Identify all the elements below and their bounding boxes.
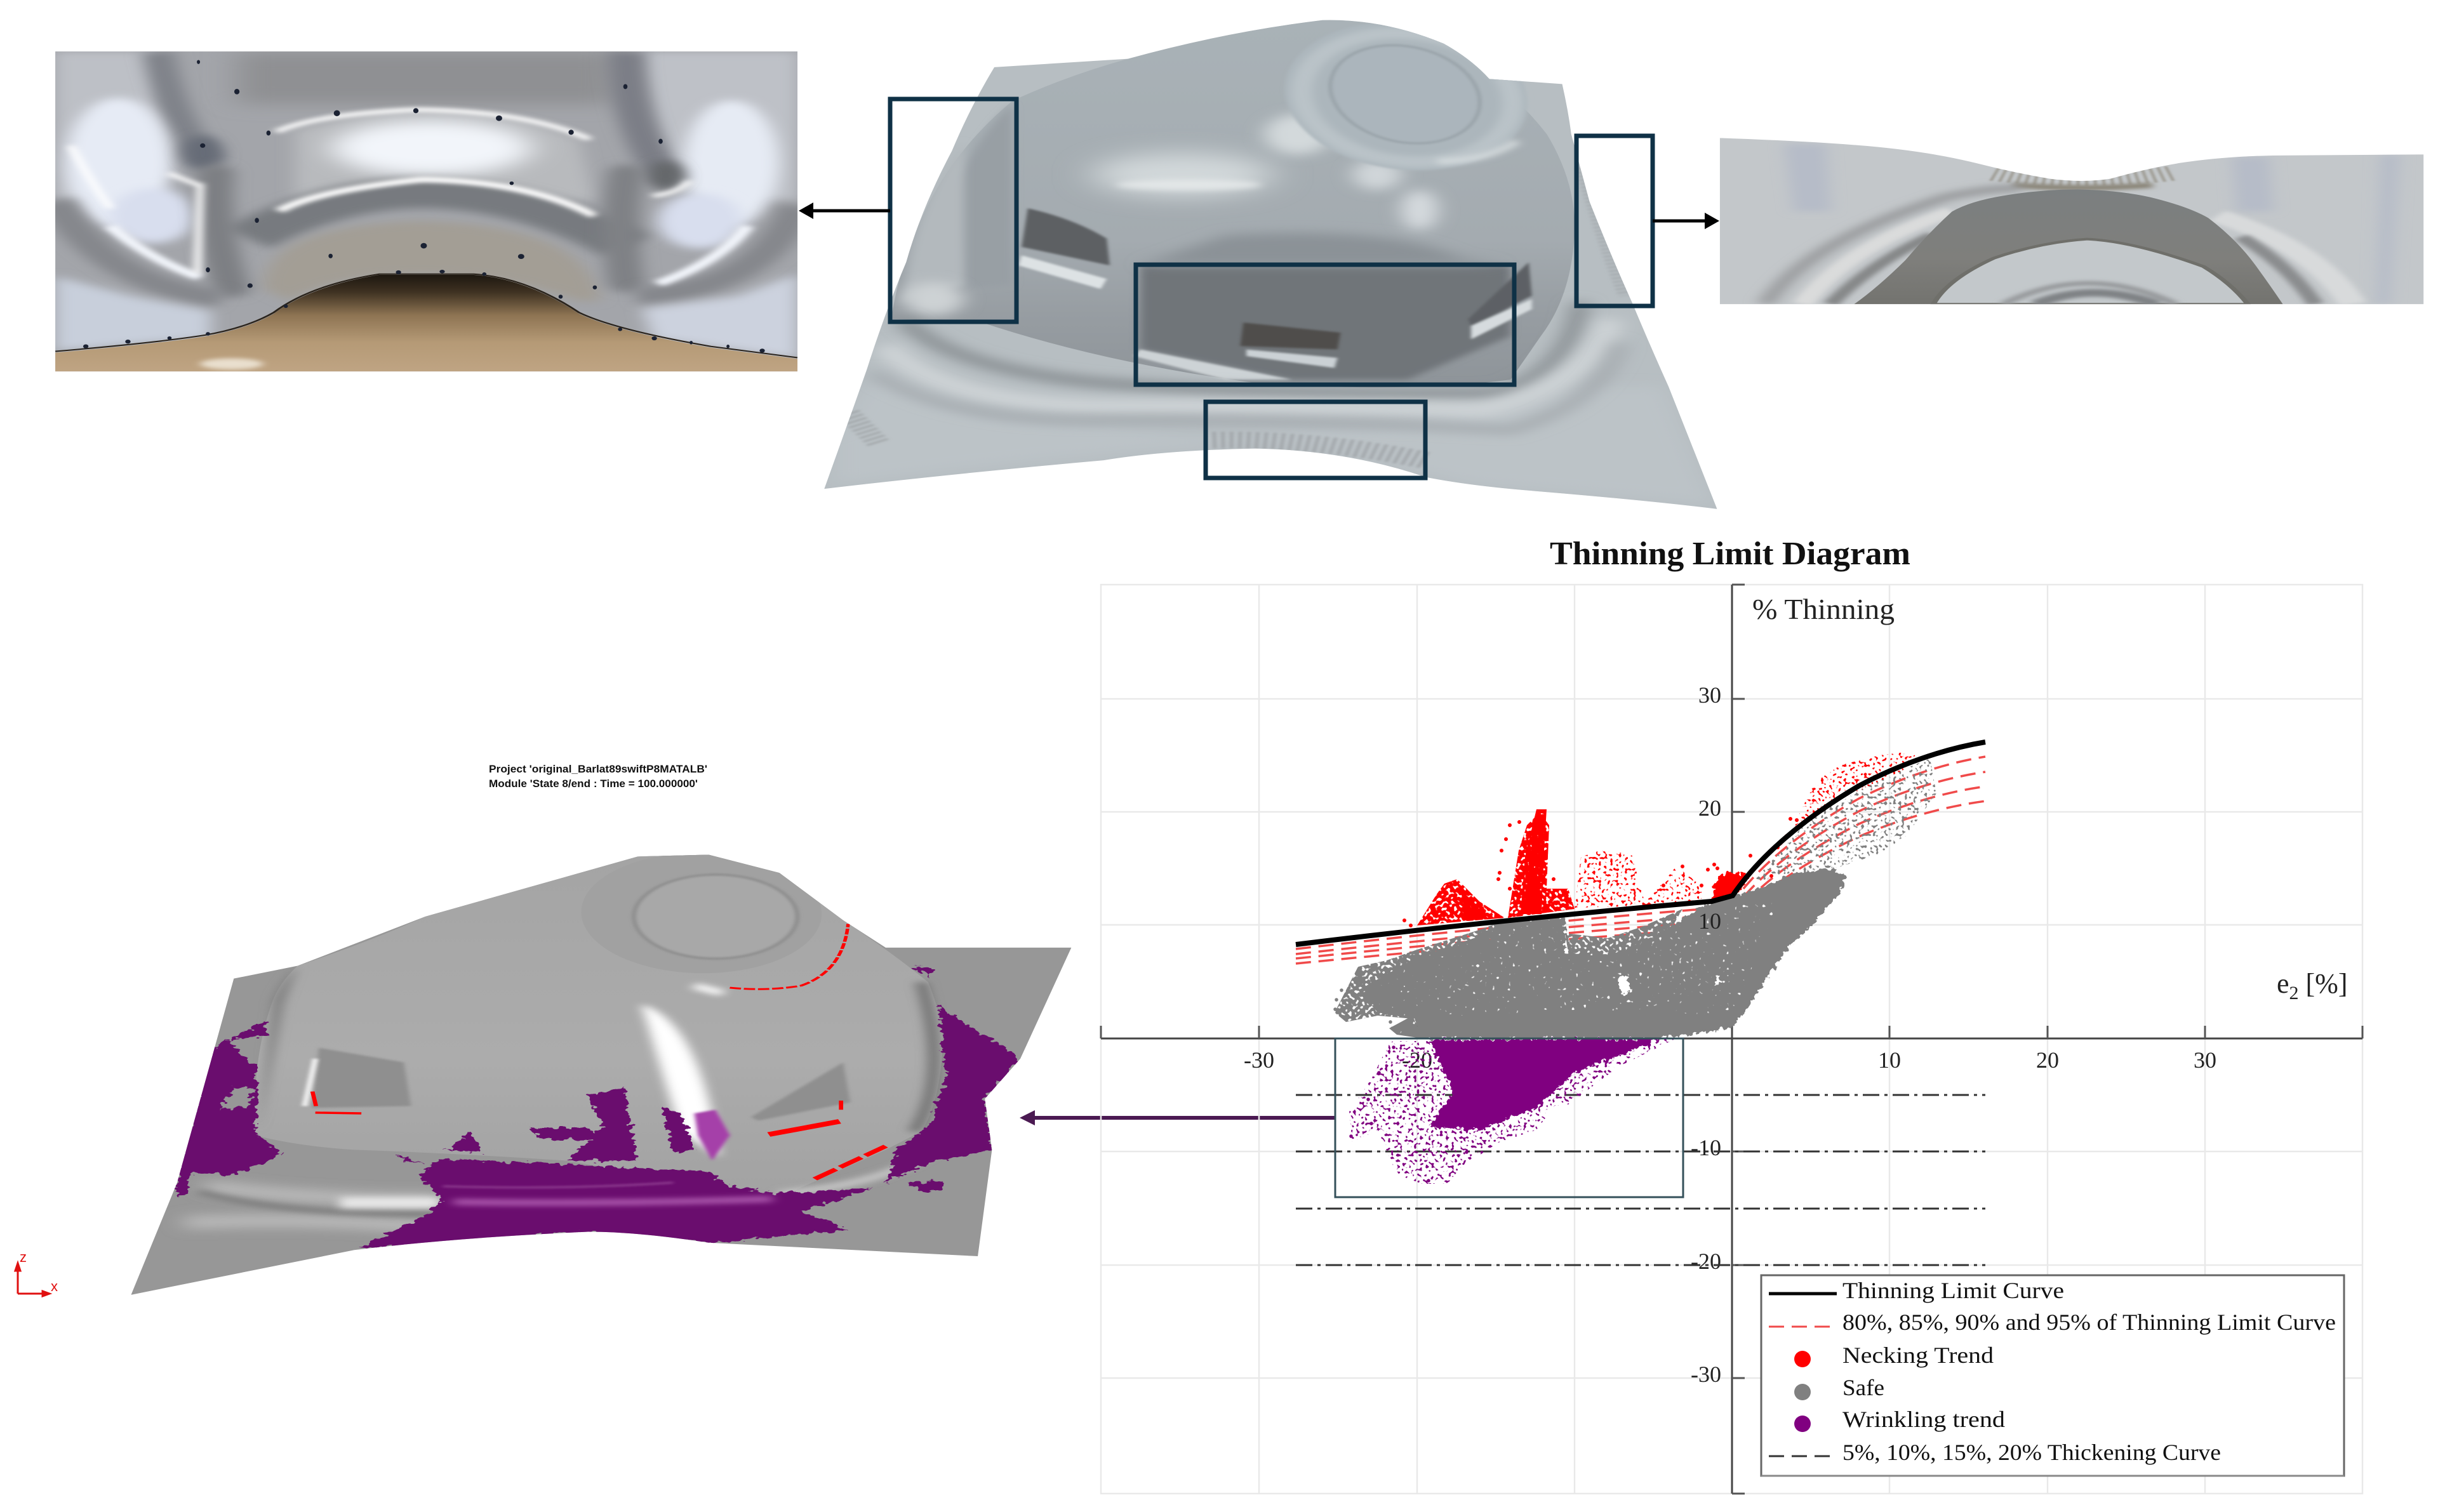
axis tick labels: -20	[1402, 1047, 1432, 1073]
axis triad	[15, 1249, 58, 1296]
callout box: left side region	[890, 99, 1016, 322]
arrow: to right close-up	[1653, 213, 1719, 229]
legend: wrinkling: Wrinkling trend	[1842, 1407, 2005, 1432]
photo: formed sheet metal part, centre	[824, 20, 1717, 509]
arrow: wrinkling region to simulation	[1020, 1110, 1335, 1125]
thinning limit curve	[1296, 742, 1985, 945]
legend: thinning limit curve: Thinning Limit Curve	[1842, 1278, 2064, 1303]
arrow: to left close-up	[799, 202, 890, 219]
callout box: right side region	[1576, 136, 1653, 306]
icon: black target dots on the part	[83, 60, 765, 353]
x axis label: [%]	[2299, 968, 2348, 999]
axis triad: x	[51, 1278, 58, 1294]
wrinkling regions in purple	[176, 967, 1020, 1249]
axis tick labels: -10	[1691, 1135, 1721, 1160]
simulation header text: Module 'State 8/end : Time = 100.000000'	[489, 778, 698, 790]
axis tick labels: 20	[2036, 1047, 2059, 1073]
icon: end cap circular boss	[1287, 23, 1526, 170]
legend: wrinkling	[1794, 1407, 2005, 1432]
legend: necking: Necking Trend	[1842, 1343, 1994, 1368]
axis tick labels: 20	[1698, 795, 1721, 821]
axis triad: z	[20, 1249, 27, 1265]
thickening curves	[1296, 1095, 1985, 1265]
chart title: Thinning Limit Diagram	[1550, 536, 1910, 572]
necking regions in red	[312, 924, 886, 1179]
icon: front recessed pocket	[1241, 322, 1340, 368]
legend: necking	[1794, 1343, 1994, 1368]
percentage of thinning limit curves	[1296, 757, 1985, 964]
chart: thinning limit diagram	[1101, 585, 2362, 1494]
callout box: front flange wrinkles	[1206, 402, 1425, 478]
icon: left recessed pocket	[1018, 208, 1110, 289]
necking trend data points	[1404, 752, 1916, 925]
photo: left close-up of formed part with wood table	[55, 51, 797, 371]
axis tick labels: -20	[1691, 1249, 1721, 1274]
axis tick labels	[1244, 682, 2216, 1387]
y axis label: % Thinning	[1752, 593, 1895, 625]
legend: safe: Safe	[1842, 1375, 1884, 1400]
region box: wrinkling data	[1335, 1038, 1683, 1197]
safe data points	[1335, 759, 1936, 1038]
x axis label: e	[2277, 968, 2289, 999]
simulation header text	[489, 763, 707, 790]
axis tick labels: -30	[1691, 1362, 1721, 1387]
callout box: front pocket region	[1136, 265, 1514, 385]
simulation: thickness result on formed part	[131, 854, 1072, 1295]
wrinkling trend data points	[1349, 1038, 1676, 1184]
axis tick labels: 30	[1698, 682, 1721, 708]
photo: right close-up of wrinkled flange	[1719, 138, 2424, 305]
axis tick labels: 30	[2194, 1047, 2216, 1073]
legend: percent of limit: 80%, 85%, 90% and 95% of Thinning Limit Curve	[1842, 1310, 2336, 1335]
axis tick labels: 10	[1878, 1047, 1901, 1073]
y tick label 10: 10	[1698, 908, 1721, 934]
legend: thickening: 5%, 10%, 15%, 20% Thickening Curve	[1842, 1440, 2221, 1465]
simulation header text: Project 'original_Barlat89swiftP8MATALB'	[489, 763, 707, 775]
icon: right recessed pocket	[1468, 262, 1532, 340]
x axis label: 2	[2289, 983, 2299, 1004]
gaps in safe data cloud	[1419, 901, 1778, 1016]
legend	[1761, 1275, 2344, 1476]
axis tick labels: -30	[1244, 1047, 1274, 1073]
legend: safe	[1794, 1375, 1884, 1400]
axis tick labels: -10	[1559, 1047, 1590, 1073]
